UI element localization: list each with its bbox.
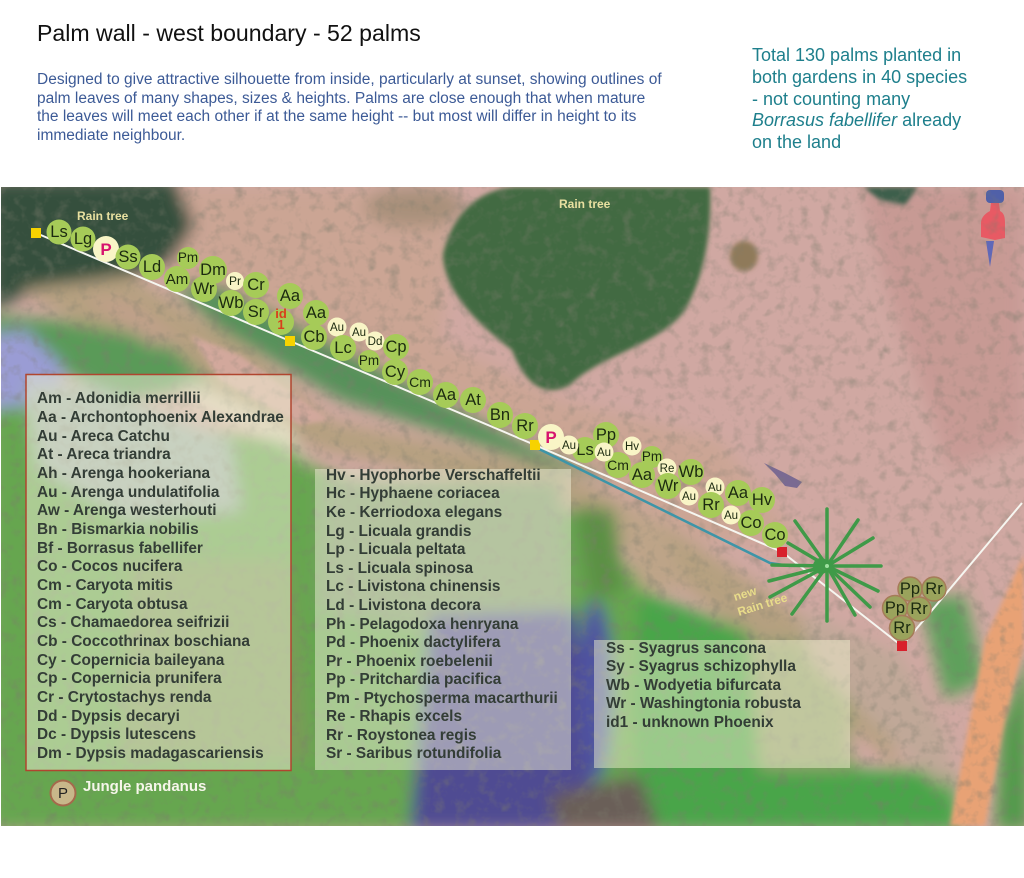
palm Cy: Cy [385,363,406,381]
palm Au [594,442,614,462]
palm Au: Au [562,440,576,452]
total palms note: both gardens in 40 species [752,67,967,87]
palm Au: Au [708,482,722,494]
palm Bn [487,402,513,428]
total palms note: Total 130 palms planted in [752,45,961,65]
palm circles along the wall [46,220,788,548]
marker: red square 1 [777,547,787,557]
palm Aa: Aa [306,304,327,322]
palm At: At [465,391,481,409]
palm Au [706,478,724,496]
aerial photo background [0,180,1024,830]
legend panel 2: Pr - Phoenix roebelenii [326,653,493,670]
palm Pp: Pp [596,426,616,444]
legend panel 2: Ph - Pelagodoxa henryana [326,616,519,633]
intro paragraph [37,71,662,144]
marker: yellow square 3 [530,440,540,450]
palm Cp [383,334,409,360]
jungle pandanus key: Jungle pandanus [83,778,206,795]
palm Am: Am [166,271,188,288]
palm Au [560,436,578,454]
palm Au [722,506,740,524]
palm Dm: Dm [200,261,226,279]
intro paragraph: the leaves will meet each other if at the same height -- but most will differ in height to its [37,108,637,125]
palm Wr [655,473,681,499]
palm Wb [678,459,704,485]
legend panel 1: Cm - Caryota obtusa [37,596,188,613]
palm Pp [593,422,619,448]
total palms note: Borrasus fabellifer already [752,110,961,130]
palm Wr [191,276,217,302]
legend panel 1: Au - Arenga undulatifolia [37,484,220,501]
palm Pp: Pp [900,580,920,598]
legend panel 2 [315,467,571,770]
palm Re: Re [660,463,674,475]
legend panel 3: Wr - Washingtonia robusta [606,695,801,712]
palm Au: Au [682,491,696,503]
palm Co: Co [764,526,786,544]
palm Dd: Dd [368,336,382,348]
legend panel 1: Am - Adonidia merrillii [37,390,201,407]
palm At [460,387,486,413]
palm Rr: Rr [925,580,943,598]
palm Cp: Cp [385,338,407,356]
legend panel 2: Ke - Kerriodoxa elegans [326,504,502,521]
palm Pm: Pm [642,449,662,464]
legend panel 3 [594,640,850,768]
palm Aa: Aa [280,287,301,305]
legend panel 1: Bn - Bismarkia nobilis [37,521,199,538]
palm Dm [199,256,227,284]
palm Wr: Wr [194,280,215,298]
legend panel 1: Dm - Dypsis madagascariensis [37,745,264,762]
white boundary line [36,233,1022,646]
palm Ls: Ls [576,441,594,459]
palm Pp: Pp [885,599,905,617]
legend panel 2: Sr - Saribus rotundifolia [326,745,502,762]
palm Dd [366,332,384,350]
palm Aa [303,300,329,326]
palm Rr: Rr [910,600,928,618]
legend panel 2: Hc - Hyphaene coriacea [326,485,500,502]
palm Rr [698,492,724,518]
palm Pr: Pr [229,274,241,288]
palm Am [164,266,190,292]
legend panel 1: Aa - Archontophoenix Alexandrae [37,409,284,426]
palm Cb [301,324,327,350]
palm Rr: Rr [516,417,534,435]
legend panel 3: Wb - Wodyetia bifurcata [606,677,781,694]
palm Cy [382,359,408,385]
palm Cm: Cm [607,457,629,473]
legend panel 2: Pd - Phoenix dactylifera [326,634,501,651]
legend panel 1: Co - Cocos nucifera [37,558,183,575]
palm Pm [641,446,663,468]
legend panel 2: Pm - Ptychosperma macarthurii [326,690,558,707]
palm Hv: Hv [625,441,639,453]
palm Aa: Aa [436,386,457,404]
figure at top right [981,190,1005,267]
palm Au [680,486,698,506]
palm Au: Au [330,322,344,334]
marker: yellow square 2 [285,336,295,346]
blue irrigation line [535,447,790,566]
palm Au [328,318,346,336]
legend panel 1: Ah - Arenga hookeriana [37,465,210,482]
palm Aa: Aa [632,466,653,484]
palm Ss: Ss [118,248,138,266]
legend panel 2: Ld - Livistona decora [326,597,481,614]
palm Sr [243,299,269,325]
palm Au: Au [724,510,738,522]
intro paragraph: immediate neighbour. [37,127,185,144]
legend panel 1: Dc - Dypsis lutescens [37,726,196,743]
legend panel 2: Hv - Hyophorbe Verschaffeltii [326,467,541,484]
palm Hv [622,436,642,456]
palm Au [350,322,368,342]
new rain tree label: new [732,583,759,604]
legend panel 2: Lc - Livistona chinensis [326,578,500,595]
palm Lg: Lg [74,230,92,248]
palm P [93,236,119,262]
palm Lc: Lc [334,339,352,357]
palm P: P [545,428,557,447]
palm Pm: Pm [178,250,198,265]
palm id1: 1 [277,317,285,332]
legend panel 1: Aw - Arenga westerhouti [37,502,217,519]
palm Ld [139,254,165,280]
palm Re [658,458,676,478]
palm Wb: Wb [219,294,243,312]
marker: start yellow square [31,228,41,238]
palm Co [738,510,764,536]
legend panel 1: Cy - Copernicia baileyana [37,652,225,669]
palm Aa [277,283,303,309]
legend panel 3: id1 - unknown Phoenix [606,714,774,731]
jungle pandanus key: P [58,785,68,802]
palm Rr: Rr [702,496,720,514]
jungle pandanus key [50,778,206,806]
legend panel 2: Lp - Licuala peltata [326,541,466,558]
palm Rr [512,413,538,439]
marker: red square 2 [897,641,907,651]
legend panel 1: Cm - Caryota mitis [37,577,173,594]
legend panel 3: Ss - Syagrus sancona [606,640,766,657]
legend panel 1: Au - Areca Catchu [37,428,170,445]
palm Aa [725,480,751,506]
legend panel 3: Sy - Syagrus schizophylla [606,658,796,675]
palm P [538,424,564,450]
palm Bn: Bn [490,406,510,424]
legend panel 2: Ls - Licuala spinosa [326,560,474,577]
palm Ls: Ls [50,223,68,241]
total palms note [752,45,967,152]
legend panel 1 [26,374,291,770]
palm Cm [605,452,631,478]
total palms note: on the land [752,132,841,152]
palm Pr [226,272,244,290]
palm Ls [46,220,72,244]
legend panel 2: Pp - Pritchardia pacifica [326,671,502,688]
palm Aa [433,382,459,408]
palm Aa: Aa [728,484,749,502]
palm Au: Au [597,447,611,459]
legend panel 2: Re - Rhapis excels [326,708,462,725]
palm Cm [407,369,433,395]
palm Lc [330,335,356,361]
legend panel 2: Rr - Roystonea regis [326,727,477,744]
palm P: P [100,240,112,259]
new rain tree symbol [769,509,881,621]
palm Pm: Pm [359,353,379,368]
intro paragraph: Designed to give attractive silhouette from inside, particularly at sunset, showing outlines of [37,71,662,88]
palm Cr [243,272,269,298]
palm Cm: Cm [409,374,431,390]
palm Wb: Wb [679,463,703,481]
palm Co: Co [740,514,762,532]
palm Hv: Hv [752,491,773,509]
palm Wr: Wr [658,477,679,495]
legend panel 1: Bf - Borrasus fabellifer [37,540,203,557]
legend panel 2: Lg - Licuala grandis [326,523,471,540]
palm Aa [629,462,655,488]
legend panel 1: Cp - Copernicia prunifera [37,670,222,687]
palm Cr: Cr [247,276,265,294]
palm Sr: Sr [248,303,265,321]
dark shadow on dirt [764,463,802,488]
legend panel 1: Dd - Dypsis decaryi [37,708,180,725]
palm Au: Au [352,327,366,339]
intro paragraph: palm leaves of many shapes, sizes & heights. Palms are close enough that when mature [37,90,645,107]
legend panel 1: At - Areca triandra [37,446,171,463]
legend panel 1: Cr - Crytostachys renda [37,689,212,706]
palm cluster at the corner [882,577,946,640]
legend panel 1: Cs - Chamaedorea seifrizii [37,614,229,631]
palm id1: id [275,306,287,321]
palm Pm [177,247,199,269]
palm Lg [70,226,96,252]
total palms note: - not counting many [752,89,910,109]
palm Ls [572,437,598,463]
legend panel 1: Cb - Coccothrinax boschiana [37,633,250,650]
new rain tree label: Rain tree [736,590,789,619]
rain tree label centre: Rain tree [559,197,611,211]
title: Palm wall - west boundary - 52 palms [37,20,421,46]
palm Cb: Cb [303,328,325,346]
palm Ld: Ld [143,258,161,276]
palm Wb [218,290,244,316]
palm Ss [116,244,140,270]
palm Rr: Rr [893,619,911,637]
palm Hv [749,487,775,513]
palm Pm [358,350,380,372]
rain tree label left: Rain tree [77,209,129,223]
palm Co [762,522,788,548]
palm id1 [268,306,294,335]
